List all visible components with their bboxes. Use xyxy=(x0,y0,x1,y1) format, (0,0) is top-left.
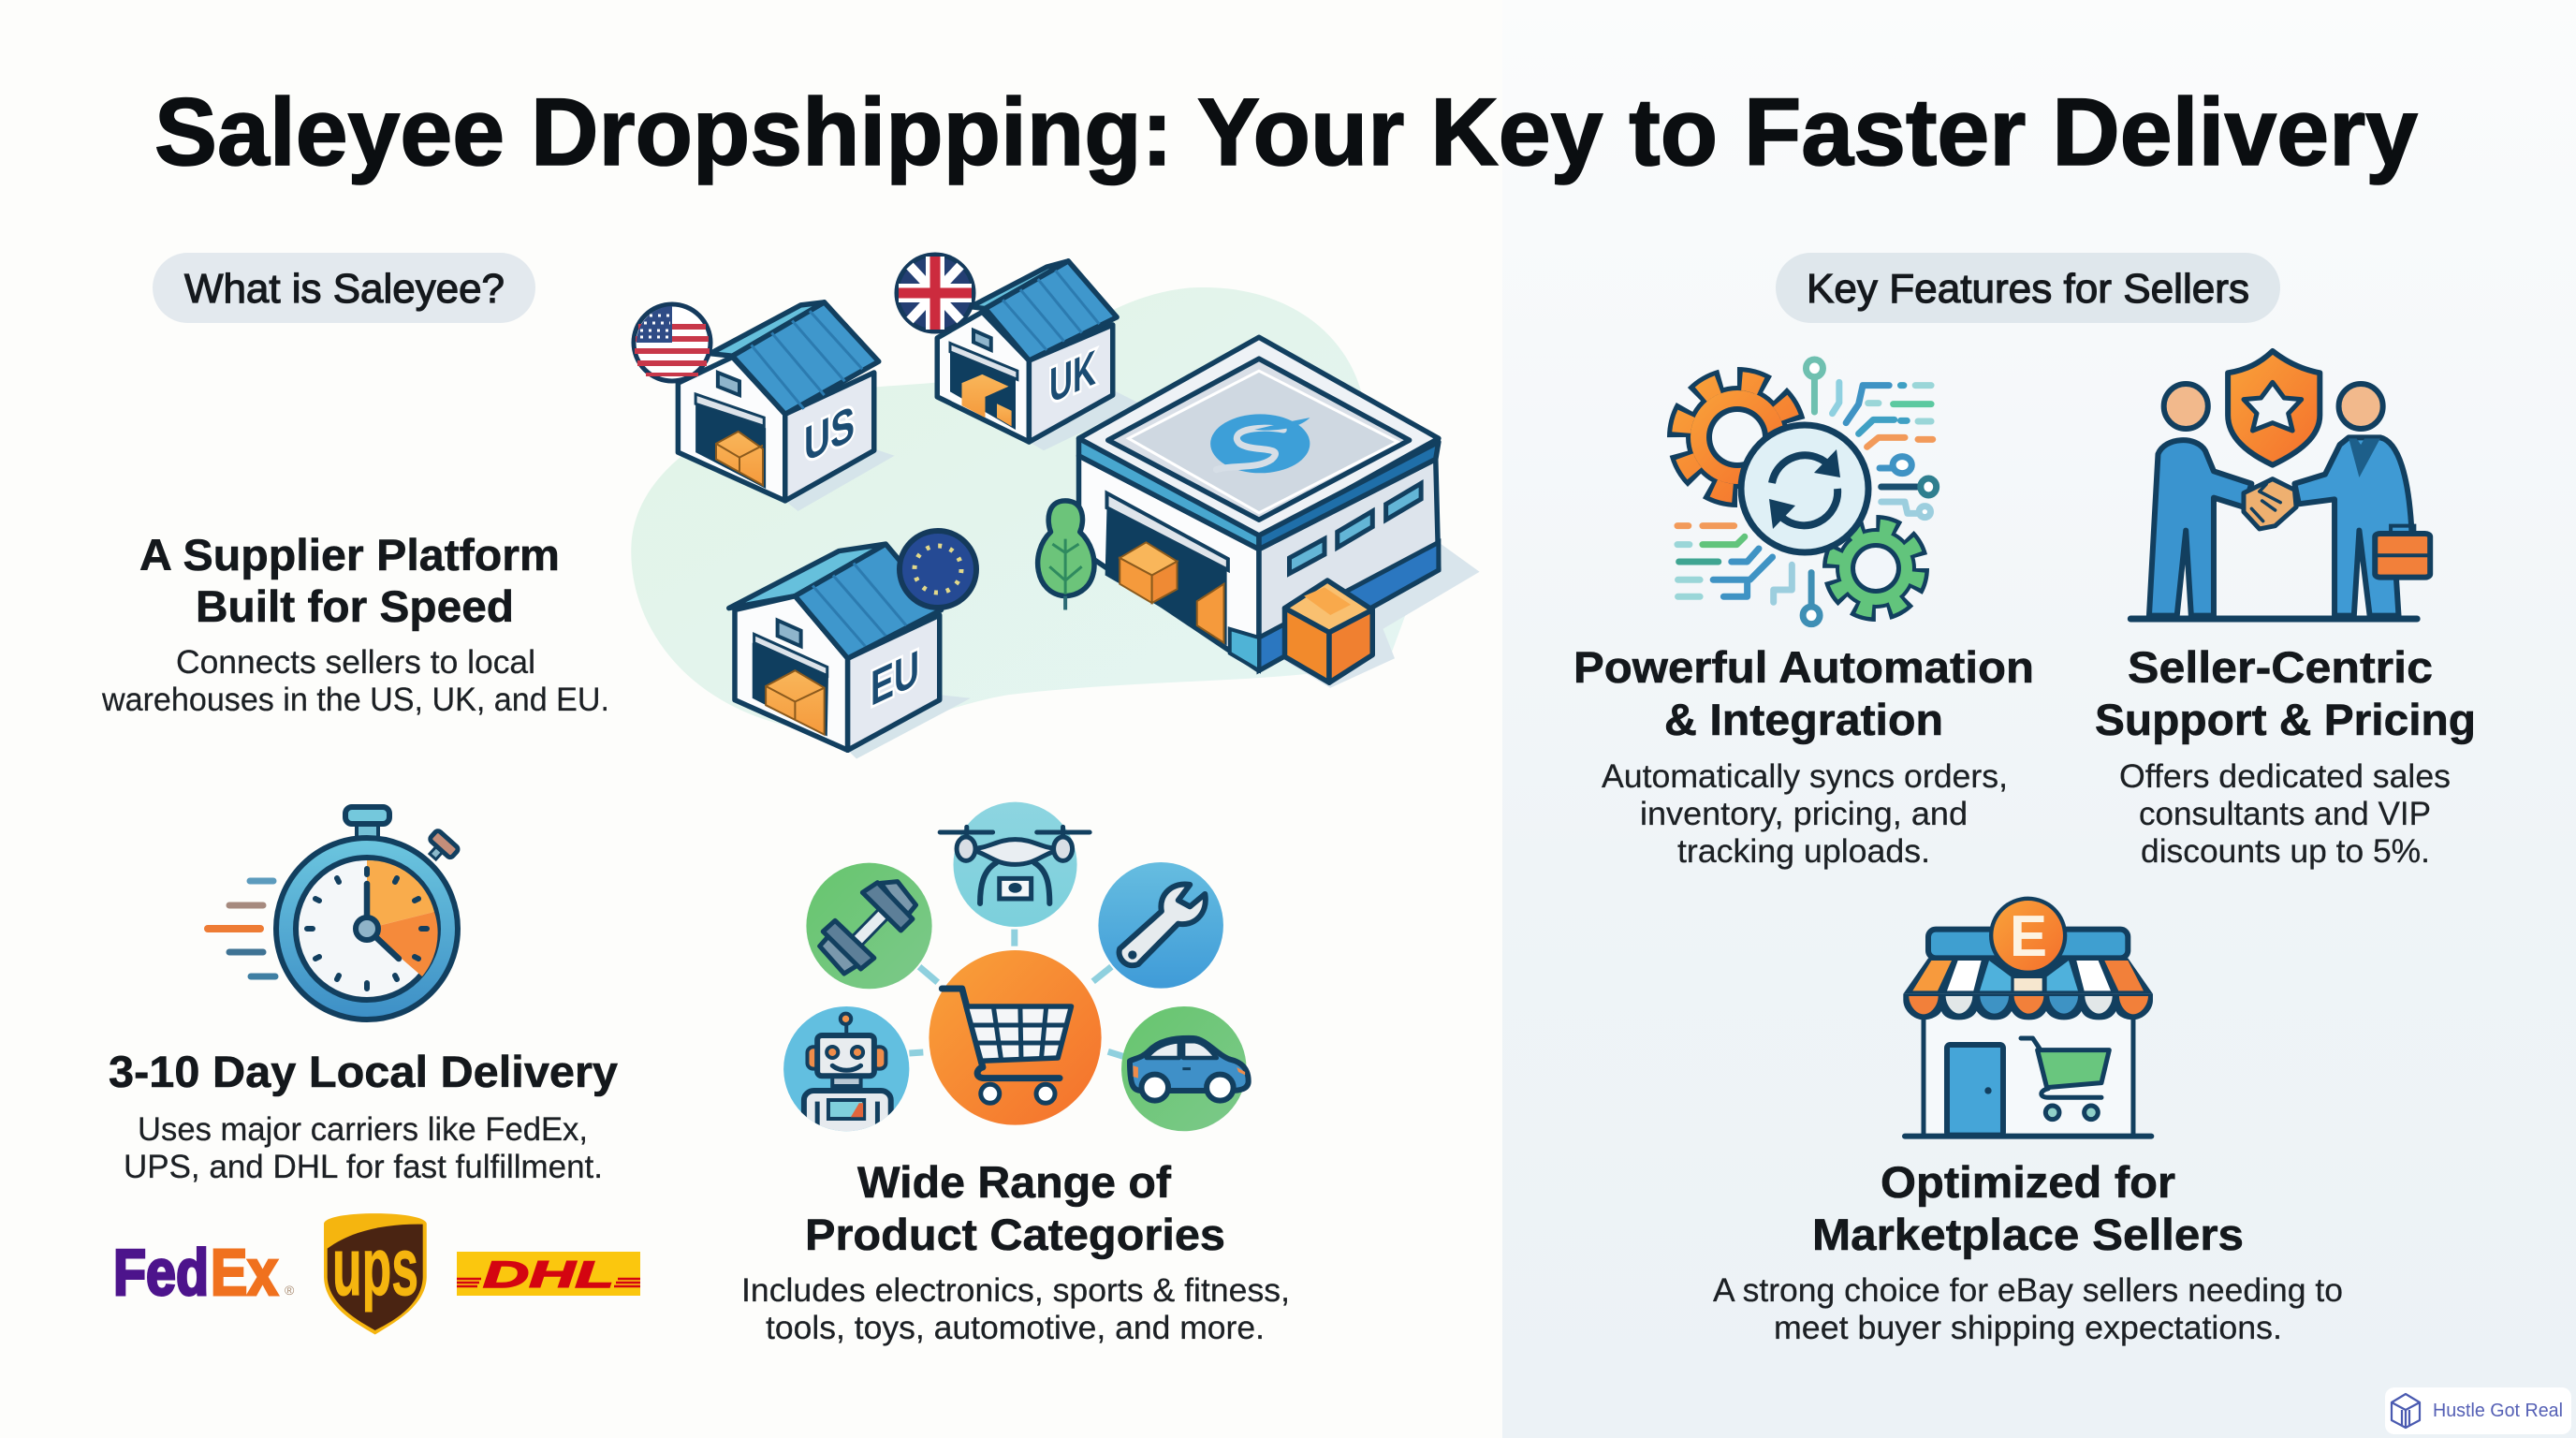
body text: carriers: UPS, and DHL for fast fulfillment. xyxy=(124,1149,603,1185)
panel: What is Saleyee xyxy=(101,253,609,718)
circle: drone xyxy=(940,802,1090,927)
watermark badge: Hustle Got Real: Hustle Got Real xyxy=(2433,1401,2563,1421)
icon: stopwatch xyxy=(208,807,460,1020)
body text: connects sellers: Connects sellers to local xyxy=(176,644,535,681)
pill heading: What is Saleyee?: What is Saleyee? xyxy=(184,266,505,312)
heading: Optimized for Marketplace Sellers xyxy=(1812,1157,2244,1259)
body text: marketplace: A strong choice for eBay sellers needing to xyxy=(1713,1272,2343,1309)
gear: orange xyxy=(1681,381,1793,493)
feature: Powerful Automation xyxy=(1573,360,2034,870)
logo: DHL: DHL xyxy=(483,1255,614,1296)
logo: UPS xyxy=(324,1213,427,1335)
label: US: US xyxy=(804,394,855,473)
body text: marketplace: meet buyer shipping expectations. xyxy=(1774,1310,2282,1346)
logo: FedEx: Fed xyxy=(113,1236,209,1309)
gear: green xyxy=(1834,526,1918,610)
logo: FedEx xyxy=(113,1236,295,1309)
background panel: left xyxy=(0,0,1502,1438)
heading: A Supplier Platform Built for Speed: Built for Speed xyxy=(196,581,514,631)
person right xyxy=(2294,437,2412,616)
heading: A Supplier Platform Built for Speed: A Supplier Platform xyxy=(139,530,560,580)
heading: Powerful Automation & Integration: & Integration xyxy=(1664,695,1943,744)
title: Saleyee Dropshipping: Your Key to Faster Delivery xyxy=(154,79,2418,185)
body text: support: consultants and VIP xyxy=(2139,796,2431,832)
body text: carriers: Uses major carriers like FedEx, xyxy=(138,1111,588,1148)
tree xyxy=(1038,501,1094,609)
green blob background xyxy=(631,287,1418,734)
sync circle xyxy=(1741,425,1868,552)
flag: EU xyxy=(900,531,976,608)
body text: categories: tools, toys, automotive, and more. xyxy=(766,1310,1265,1346)
pill heading: Key Features for Sellers: Key Features for Sellers xyxy=(1807,266,2249,312)
body text: connects sellers xyxy=(101,644,609,718)
label: UK: UK xyxy=(1049,339,1096,414)
body text: automation xyxy=(1602,758,2008,870)
circle: wrench xyxy=(1098,862,1223,989)
body text: automation: inventory, pricing, and xyxy=(1640,796,1968,832)
feature: Optimized for Marketplace Sellers xyxy=(1713,897,2343,1346)
background panel: right xyxy=(1502,0,2576,1438)
body text: support: discounts up to 5%. xyxy=(2141,833,2430,870)
icon: gears and sync xyxy=(1677,360,1937,624)
heading: Powerful Automation & Integration: Powerful Automation xyxy=(1573,642,2034,692)
logo: FedEx: ® xyxy=(285,1283,295,1298)
heading: Seller-Centric Support & Pricing: Seller-Centric xyxy=(2128,642,2433,692)
circle: dumbbell xyxy=(806,863,932,989)
body text: support xyxy=(2119,758,2451,870)
body text: support: Offers dedicated sales xyxy=(2119,758,2451,795)
heading: A Supplier Platform Built for Speed xyxy=(139,530,560,631)
briefcase xyxy=(2375,526,2430,578)
flag: UK xyxy=(897,255,973,331)
person left xyxy=(2149,440,2251,616)
panel: Wide Range of Product Categories xyxy=(741,802,1290,1346)
heading: Seller-Centric Support & Pricing: Support & Pricing xyxy=(2095,695,2476,744)
warehouse: US xyxy=(634,302,895,511)
body text: connects sellers: warehouses in the US, UK, and EU. xyxy=(101,682,609,718)
logo: FedEx: Ex xyxy=(211,1236,278,1309)
heading: 3-10 Day Local Delivery: 3-10 Day Local Delivery xyxy=(109,1047,618,1096)
feature: Seller-Centric Support xyxy=(2095,351,2476,870)
heading: Optimized for Marketplace Sellers: Marketplace Sellers xyxy=(1812,1210,2244,1259)
heading: Wide Range of Product Categories: Wide Range of xyxy=(857,1157,1171,1207)
label: EU: EU xyxy=(871,638,919,717)
hands xyxy=(2244,479,2296,529)
heading: Wide Range of Product Categories: Product Categories xyxy=(805,1210,1225,1259)
heading: Seller-Centric Support & Pricing xyxy=(2095,642,2476,744)
panel: 3-10 Day Local Delivery xyxy=(109,807,640,1335)
panel: Key Features for Sellers xyxy=(1573,253,2476,1346)
body text: categories: Includes electronics, sports & fitness, xyxy=(741,1272,1290,1309)
illustration: warehouse network xyxy=(631,255,1480,759)
pill heading: What is Saleyee? xyxy=(153,253,535,323)
body text: automation: tracking uploads. xyxy=(1677,833,1930,870)
company logo on roof xyxy=(1210,414,1310,473)
body text: carriers xyxy=(124,1111,603,1185)
icon: storefront xyxy=(1903,897,2153,1137)
icon: handshake with shield xyxy=(2130,351,2430,619)
body text: categories xyxy=(741,1272,1290,1346)
logo: DHL xyxy=(457,1252,640,1296)
heading: Optimized for Marketplace Sellers: Optimized for xyxy=(1881,1157,2175,1207)
body text: marketplace xyxy=(1713,1272,2343,1346)
letter E badge: E xyxy=(2010,904,2047,969)
body text: automation: Automatically syncs orders, xyxy=(1602,758,2008,795)
icon: cube xyxy=(2392,1394,2420,1428)
logo: UPS: ups xyxy=(332,1222,418,1313)
heading: Powerful Automation & Integration xyxy=(1573,642,2034,744)
heading: Wide Range of Product Categories xyxy=(805,1157,1225,1259)
pill heading: Key Features for Sellers xyxy=(1776,253,2280,323)
circle: car xyxy=(1121,1006,1249,1131)
shield xyxy=(2228,351,2320,465)
warehouse: main hub xyxy=(1038,337,1480,688)
circuit lines xyxy=(1677,360,1937,624)
flag: US xyxy=(634,304,710,381)
speed lines xyxy=(208,881,275,976)
watermark badge: Hustle Got Real xyxy=(2385,1387,2571,1434)
circle: robot xyxy=(783,1006,909,1140)
icon cluster: product categories xyxy=(783,802,1249,1140)
warehouse: UK xyxy=(897,255,1140,450)
warehouse: EU xyxy=(729,531,976,759)
circle: cart xyxy=(929,950,1102,1125)
connectors xyxy=(909,930,1123,1056)
